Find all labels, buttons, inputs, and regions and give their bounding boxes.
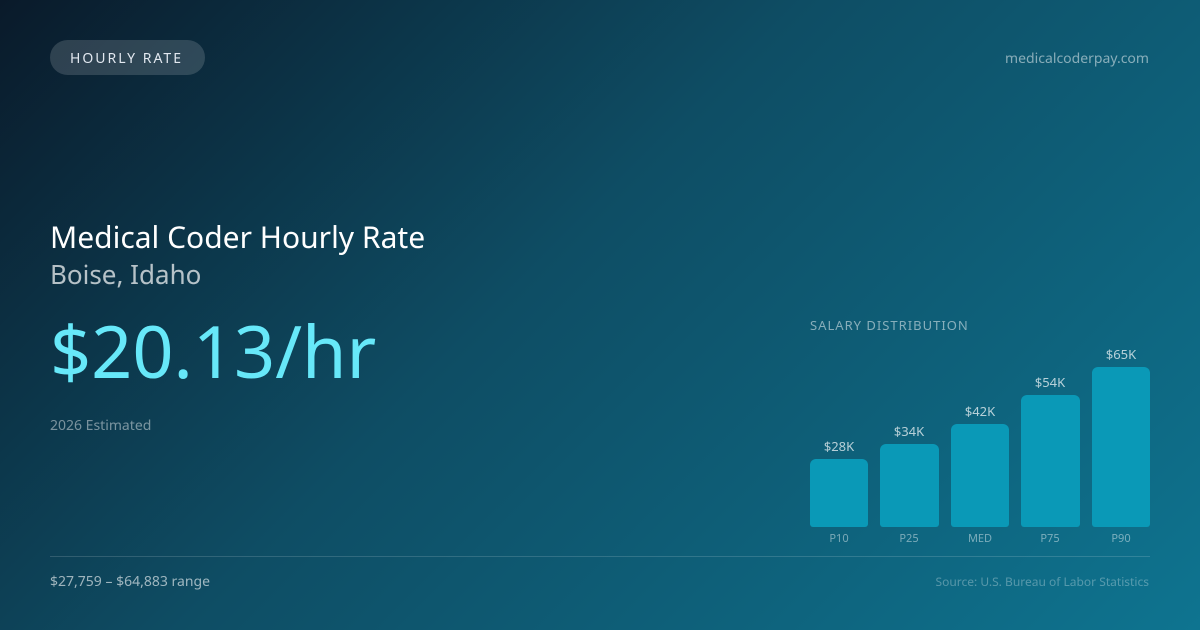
badge: hourly rate: HOURLY RATE (70, 49, 183, 68)
bar P25 (880, 444, 939, 527)
site name: medicalcoderpay.com (1005, 49, 1149, 68)
value P10: $28K (824, 437, 854, 455)
source note: Source: U.S. Bureau of Labor Statistics (936, 573, 1149, 590)
label P90: P90 (1111, 531, 1131, 546)
bar P75 (1021, 395, 1080, 527)
salary range: $27,759 – $64,883 range (50, 572, 210, 591)
label P75: P75 (1040, 531, 1060, 546)
value P25: $34K (894, 422, 924, 440)
subtitle: location: Boise, Idaho (50, 256, 201, 292)
bar MED (951, 424, 1009, 527)
value P90: $65K (1106, 345, 1136, 363)
chart heading: SALARY DISTRIBUTION (810, 316, 969, 334)
label MED: MED (968, 531, 992, 546)
bar P90 (1092, 367, 1150, 527)
bar P10 (810, 459, 868, 527)
headline value: $20.13/hr (50, 302, 376, 400)
value MED: $42K (965, 402, 995, 420)
label P10: P10 (829, 531, 849, 546)
bar chart: salary distribution (810, 316, 1150, 546)
year note: 2026 Estimated (50, 416, 151, 435)
title: Medical Coder Hourly Rate (50, 216, 425, 257)
value P75: $54K (1035, 373, 1065, 391)
badge: hourly rate (50, 40, 205, 75)
label P25: P25 (899, 531, 919, 546)
